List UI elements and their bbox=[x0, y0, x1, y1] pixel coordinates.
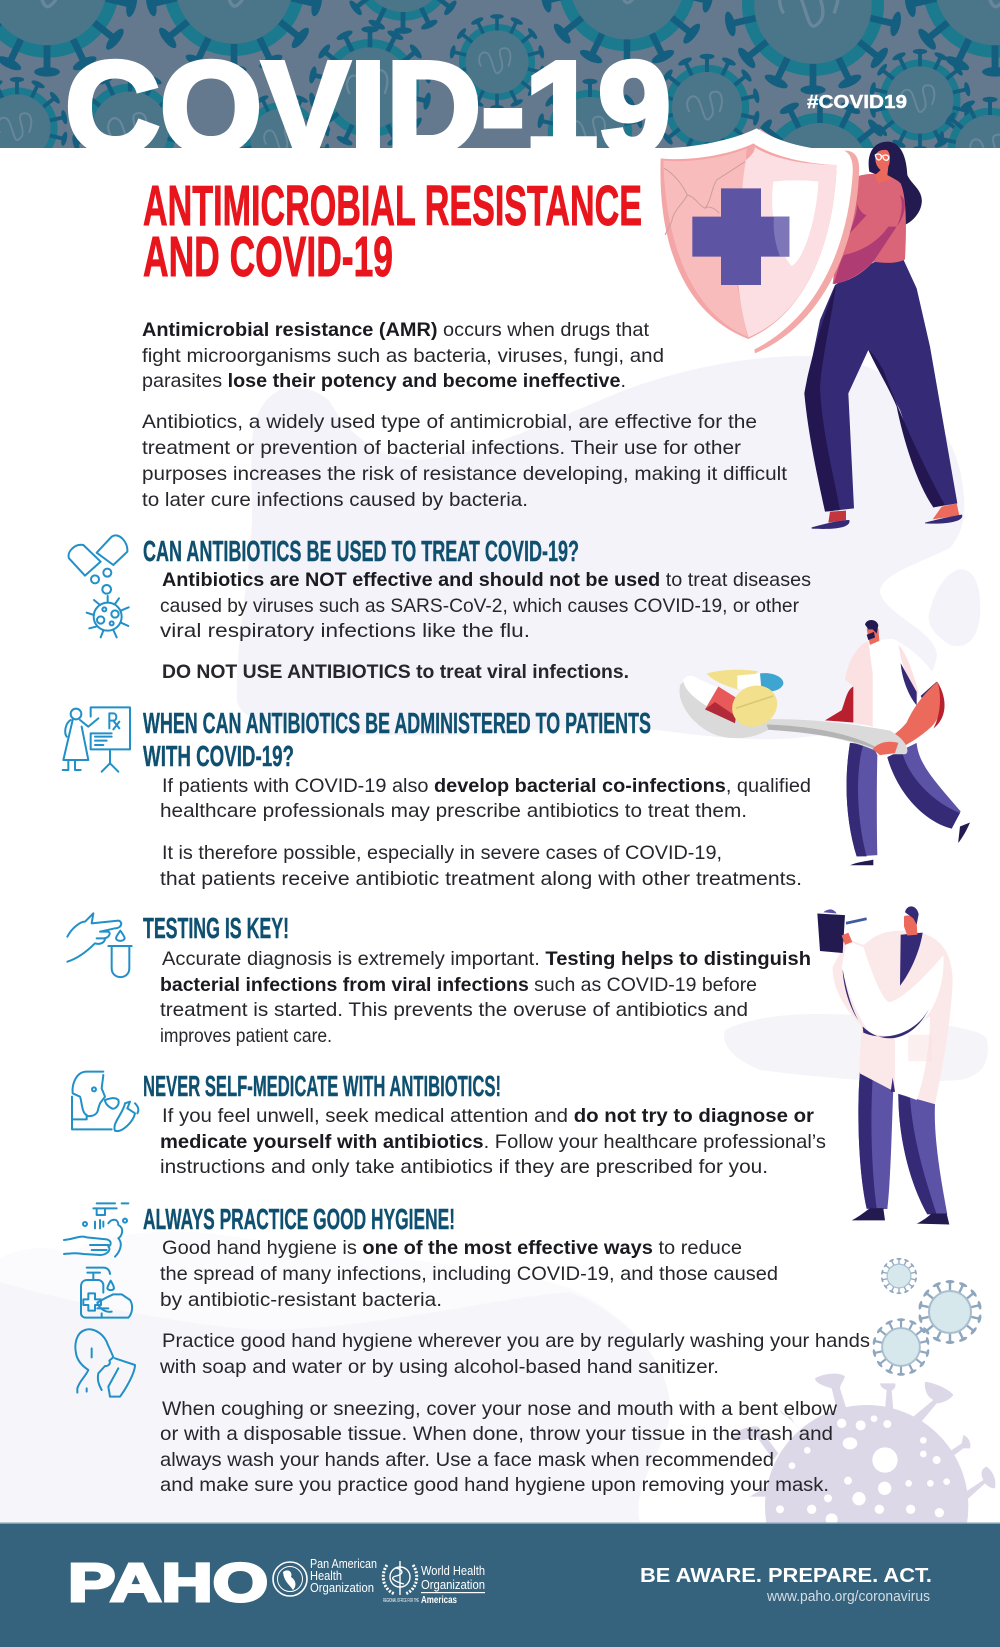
text block: testing: bacterial infections from viral infections such as COVID-19 before bbox=[160, 974, 757, 996]
woman face bbox=[875, 150, 893, 183]
man shirt bbox=[868, 639, 938, 743]
man arms bbox=[825, 687, 853, 722]
text block: testing: Accurate diagnosis is extremely important. Testing helps to distinguish bbox=[162, 948, 811, 970]
subtitle bbox=[143, 174, 642, 289]
text block: hand hygiene: or with a disposable tissue. When done, throw your tissue in the trash and bbox=[160, 1423, 833, 1445]
intro paragraph 2: Antibiotics, a widely used type of antimicrobial, are effective for the bbox=[142, 411, 757, 433]
text block: hand hygiene: When coughing or sneezing, cover your nose and mouth with a bent elbow bbox=[162, 1398, 838, 1420]
man head bbox=[867, 629, 879, 645]
woman pants bbox=[805, 259, 957, 512]
woman feet bbox=[828, 511, 846, 523]
icon: person coughing into elbow bbox=[75, 1329, 135, 1397]
intro paragraph 2: purposes increases the risk of resistance developing, making it difficult bbox=[142, 463, 788, 485]
doctor head bbox=[904, 916, 917, 936]
text block: testing bbox=[160, 948, 811, 1047]
icon: tap and washing hands bbox=[64, 1203, 128, 1257]
heading: testing is key: TESTING IS KEY! bbox=[143, 913, 289, 945]
intro paragraph 1: fight microorganisms such as bacteria, viruses, fungi, and bbox=[142, 345, 664, 367]
PAHO name: Pan American bbox=[310, 1556, 377, 1571]
icon: capsule and virus bbox=[69, 535, 129, 637]
text block: co-infections: It is therefore possible, especially in severe cases of COVID-19, bbox=[162, 842, 722, 864]
icons: hand washing, sanitizer and covered cough bbox=[64, 1203, 135, 1397]
heading: when can antibiotics: WITH COVID-19? bbox=[143, 741, 294, 773]
intro paragraph 1: parasites lose their potency and become ineffective . bbox=[142, 370, 626, 392]
heading: good hygiene: ALWAYS PRACTICE GOOD HYGIENE! bbox=[143, 1204, 455, 1236]
text block: co-infections: that patients receive antibiotic treatment along with other treatments. bbox=[160, 868, 802, 890]
text block: hand hygiene: Practice good hand hygiene wherever you are by regularly washing your hands bbox=[162, 1330, 870, 1352]
WHO name: REGIONAL OFFICE FOR THE bbox=[383, 1598, 419, 1604]
WHO name: World Health bbox=[421, 1563, 485, 1578]
text block: antibiotics not effective: Antibiotics are NOT effective and should not be used to treat diseases bbox=[162, 569, 811, 591]
PAHO name bbox=[310, 1556, 377, 1595]
text block: hand hygiene: the spread of many infections, including COVID-19, and those caused bbox=[160, 1263, 778, 1285]
text block: testing: improves patient care. bbox=[160, 1025, 332, 1047]
text block: antibiotics not effective: DO NOT USE ANTIBIOTICS to treat viral infections. bbox=[162, 661, 629, 683]
text block: hand hygiene: by antibiotic-resistant bacteria. bbox=[160, 1289, 442, 1311]
shield bbox=[740, 128, 859, 353]
WHO name: Organization bbox=[421, 1577, 485, 1592]
text block: co-infections bbox=[160, 775, 811, 890]
icon: doctor with prescription board bbox=[63, 707, 130, 772]
illustration: man carrying spoon with pills bbox=[679, 620, 970, 865]
WHO name bbox=[383, 1563, 485, 1606]
man pants bbox=[847, 743, 877, 856]
text block: antibiotics not effective: caused by viruses such as SARS-CoV-2, which causes COVID-19, or other bbox=[160, 595, 799, 617]
illustration: doctor with clipboard bbox=[817, 906, 953, 1224]
text block: antibiotics not effective bbox=[160, 569, 811, 683]
text block: self-medication: medicate yourself with antibiotics . Follow your healthcare professional’s bbox=[160, 1131, 826, 1153]
text block: self-medication bbox=[160, 1105, 826, 1178]
intro paragraph 2 bbox=[142, 411, 788, 511]
heading: when can antibiotics bbox=[143, 708, 651, 773]
footer band bbox=[0, 1522, 1000, 1647]
woman hair bbox=[869, 142, 922, 225]
subtitle: AND COVID-19 bbox=[143, 225, 393, 289]
doctor pants bbox=[858, 1071, 893, 1209]
doctor coat bbox=[833, 931, 953, 1104]
WHO name: Americas bbox=[421, 1595, 457, 1606]
PAHO wordmark: PAHO bbox=[68, 1553, 268, 1613]
heading: never self-medicate: NEVER SELF-MEDICATE WITH ANTIBIOTICS! bbox=[143, 1071, 501, 1103]
heading: can antibiotics: CAN ANTIBIOTICS BE USED TO TREAT COVID-19? bbox=[143, 536, 579, 568]
intro paragraph 2: treatment or prevention of bacterial infections. Their use for other bbox=[142, 437, 742, 459]
icon: person self-medicating bbox=[72, 1072, 138, 1131]
heading: when can antibiotics: WHEN CAN ANTIBIOTICS BE ADMINISTERED TO PATIENTS bbox=[143, 708, 651, 740]
text block: testing: treatment is started. This prevents the overuse of antibiotics and bbox=[160, 999, 748, 1021]
website: www.paho.org/coronavirus bbox=[766, 1588, 930, 1605]
big lavender virus bbox=[730, 1374, 995, 1608]
intro paragraph 1 bbox=[142, 319, 664, 392]
intro paragraph 1: Antimicrobial resistance (AMR) occurs when drugs that bbox=[142, 319, 650, 341]
text block: hand hygiene: and make sure you practice good hand hygiene upon removing your mask. bbox=[160, 1474, 829, 1496]
icon: sanitizer bottle and hand bbox=[81, 1268, 132, 1318]
PAHO name: Health bbox=[310, 1568, 342, 1583]
spoon bbox=[679, 682, 907, 754]
text block: self-medication: instructions and only take antibiotics if they are prescribed for you. bbox=[160, 1156, 768, 1178]
woman torso and arm bbox=[833, 174, 906, 284]
text block: hand hygiene: Good hand hygiene is one of the most effective ways to reduce bbox=[162, 1237, 742, 1259]
clipboard bbox=[817, 913, 845, 953]
hashtag: #COVID19 bbox=[807, 92, 907, 112]
text block: hand hygiene: with soap and water or by using alcohol-based hand sanitizer. bbox=[159, 1356, 719, 1378]
subtitle: ANTIMICROBIAL RESISTANCE bbox=[143, 174, 642, 238]
text block: co-infections: healthcare professionals may prescribe antibiotics to treat them. bbox=[160, 800, 747, 822]
PAHO name: Organization bbox=[310, 1580, 374, 1595]
text block: co-infections: If patients with COVID-19 also develop bacterial co-infections , qualified bbox=[162, 775, 811, 797]
text block: self-medication: If you feel unwell, seek medical attention and do not try to diagnose or bbox=[162, 1105, 814, 1127]
intro paragraph 2: to later cure infections caused by bacteria. bbox=[142, 489, 528, 511]
PAHO emblem bbox=[273, 1562, 307, 1596]
illustration: woman holding shield bbox=[650, 128, 962, 529]
background blobs bbox=[0, 356, 988, 1523]
WHO emblem bbox=[383, 1561, 417, 1595]
text block: hand hygiene: always wash your hands after. Use a face mask when recommended bbox=[160, 1449, 774, 1471]
small virus cluster bbox=[872, 1258, 982, 1376]
icon: hand and test tube bbox=[67, 913, 132, 977]
text block: antibiotics not effective: viral respiratory infections like the flu. bbox=[160, 620, 530, 642]
header banner with virus pattern bbox=[0, 0, 1000, 148]
text block: hand hygiene bbox=[159, 1237, 870, 1496]
slogan: BE AWARE. PREPARE. ACT. bbox=[640, 1564, 932, 1587]
main title COVID-19: COVID-19 bbox=[65, 34, 671, 180]
